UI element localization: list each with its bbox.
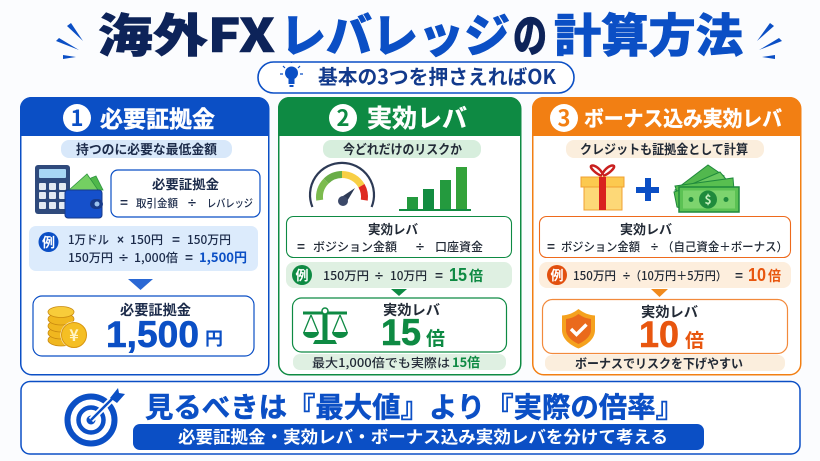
title: [98, 0, 743, 66]
example box: =: [435, 268, 443, 283]
example box: 150万円: [573, 267, 616, 284]
result box: 実効レバ: [383, 300, 440, 320]
arrow: [128, 279, 153, 290]
example box: 10: [748, 265, 766, 285]
result box: 実効レバ: [641, 302, 698, 322]
icon: calculator and wallet: [35, 165, 103, 218]
title: 海外FX: [98, 0, 275, 66]
icon: plus: [636, 178, 659, 201]
subtitle text: 基本の3つを押さえればOK: [318, 61, 556, 90]
icon: gauge: [310, 163, 374, 207]
icon: light bulb: [280, 62, 303, 87]
example box: 150万円: [323, 267, 369, 284]
formula box: 実効レバ: [620, 219, 672, 238]
example box: （10万円＋5万円）: [630, 267, 727, 284]
example box: =: [735, 268, 743, 283]
arrow: [391, 289, 407, 296]
example box: 1,000倍: [134, 249, 178, 266]
sub label: 今どれだけのリスクか: [343, 139, 462, 158]
icon: left sunburst: [56, 23, 83, 59]
example box: 15: [449, 265, 467, 285]
formula box: 実効レバ: [368, 219, 418, 238]
formula box: （自己資金＋ボーナス）: [662, 238, 788, 255]
example box: 10万円: [390, 267, 427, 284]
icon: coins: ¥: [69, 322, 79, 346]
result box: [292, 298, 506, 353]
panel heading: 1: [71, 101, 83, 133]
example box: ÷: [623, 268, 630, 283]
formula box: =: [297, 239, 305, 254]
note pill: 最大1,000倍でも実際は: [312, 354, 450, 371]
result box: 10: [639, 314, 679, 355]
result box: 1,500: [106, 314, 199, 355]
conclusion bar: 必要証拠金・実効レバ・ボーナス込み実効レバを分けて考える: [178, 423, 668, 448]
title: 計算方法: [554, 0, 743, 66]
example box: 1,500円: [199, 247, 247, 266]
icon: gift: [581, 166, 624, 210]
sub label: 持つのに必要な最低金額: [76, 139, 217, 158]
panel heading: 3: [558, 101, 570, 133]
example box: 例: [42, 232, 55, 251]
example box: [539, 262, 791, 288]
icon: target: [68, 388, 125, 444]
icon: shield: [562, 309, 595, 348]
example box: ÷: [119, 250, 128, 265]
example box: ×: [117, 232, 124, 247]
panel: conclusion: [21, 382, 800, 454]
arrow: [651, 289, 668, 297]
formula box: =: [547, 239, 555, 254]
formula box: ÷: [651, 239, 658, 254]
result box: 円: [205, 325, 223, 351]
example box: 倍: [469, 266, 483, 286]
formula box: ÷: [416, 239, 424, 254]
title: レバレッジ: [280, 0, 510, 66]
result box: [542, 300, 788, 355]
result box: 15: [381, 312, 421, 353]
example box: =: [185, 250, 193, 265]
note pill: ボーナスでリスクを下げやすい: [575, 353, 743, 372]
formula box: [540, 216, 790, 258]
formula box: =: [120, 195, 128, 210]
panel heading: 2: [337, 101, 349, 133]
formula box: レバレッジ: [207, 195, 253, 211]
example box: 倍: [768, 266, 781, 286]
example box: 例: [295, 265, 309, 284]
icon: bar chart: [399, 167, 471, 211]
panel: effective leverage: [278, 97, 521, 375]
formula box: ÷: [188, 195, 196, 210]
sub label: クレジットも証拠金として計算: [580, 139, 748, 158]
note pill: [293, 352, 506, 371]
icon: cash: [674, 165, 739, 212]
formula box: ボジション金額: [561, 238, 640, 255]
icon: coins: [48, 306, 88, 348]
panel heading: 必要証拠金: [100, 100, 215, 134]
icon: cash: $: [704, 191, 712, 208]
result box: 倍: [685, 326, 704, 353]
title: の: [513, 0, 547, 66]
formula box: 取引金額: [136, 195, 178, 211]
subtitle pill: [258, 61, 574, 93]
note pill: 15倍: [452, 352, 480, 371]
formula box: [286, 216, 512, 258]
example box: [29, 226, 258, 271]
formula box: 必要証拠金: [152, 174, 219, 193]
example box: [286, 262, 512, 288]
panel heading: ボーナス込み実効レバ: [584, 103, 782, 133]
result box: 必要証拠金: [120, 300, 191, 320]
example box: 1万ドル: [68, 231, 109, 248]
icon: right sunburst: [757, 23, 782, 59]
formula box: ボジション金額: [313, 238, 397, 255]
icon: scales: [303, 308, 348, 344]
conclusion headline: 見るべきは『最大値』より『実際の倍率』: [145, 386, 684, 426]
example box: ÷: [375, 268, 383, 283]
formula box: 口座資金: [435, 238, 483, 255]
panel: margin: [20, 97, 269, 375]
result box: 倍: [426, 324, 445, 351]
result box: [33, 296, 254, 356]
example box: 150円: [130, 231, 163, 248]
example box: 例: [550, 265, 564, 284]
panel: bonus leverage: [532, 97, 801, 375]
panel heading: 実効レバ: [367, 99, 467, 135]
example box: =: [172, 232, 180, 247]
formula box: [111, 170, 260, 217]
example box: 150万円: [187, 231, 231, 248]
example box: 150万円: [68, 249, 113, 266]
